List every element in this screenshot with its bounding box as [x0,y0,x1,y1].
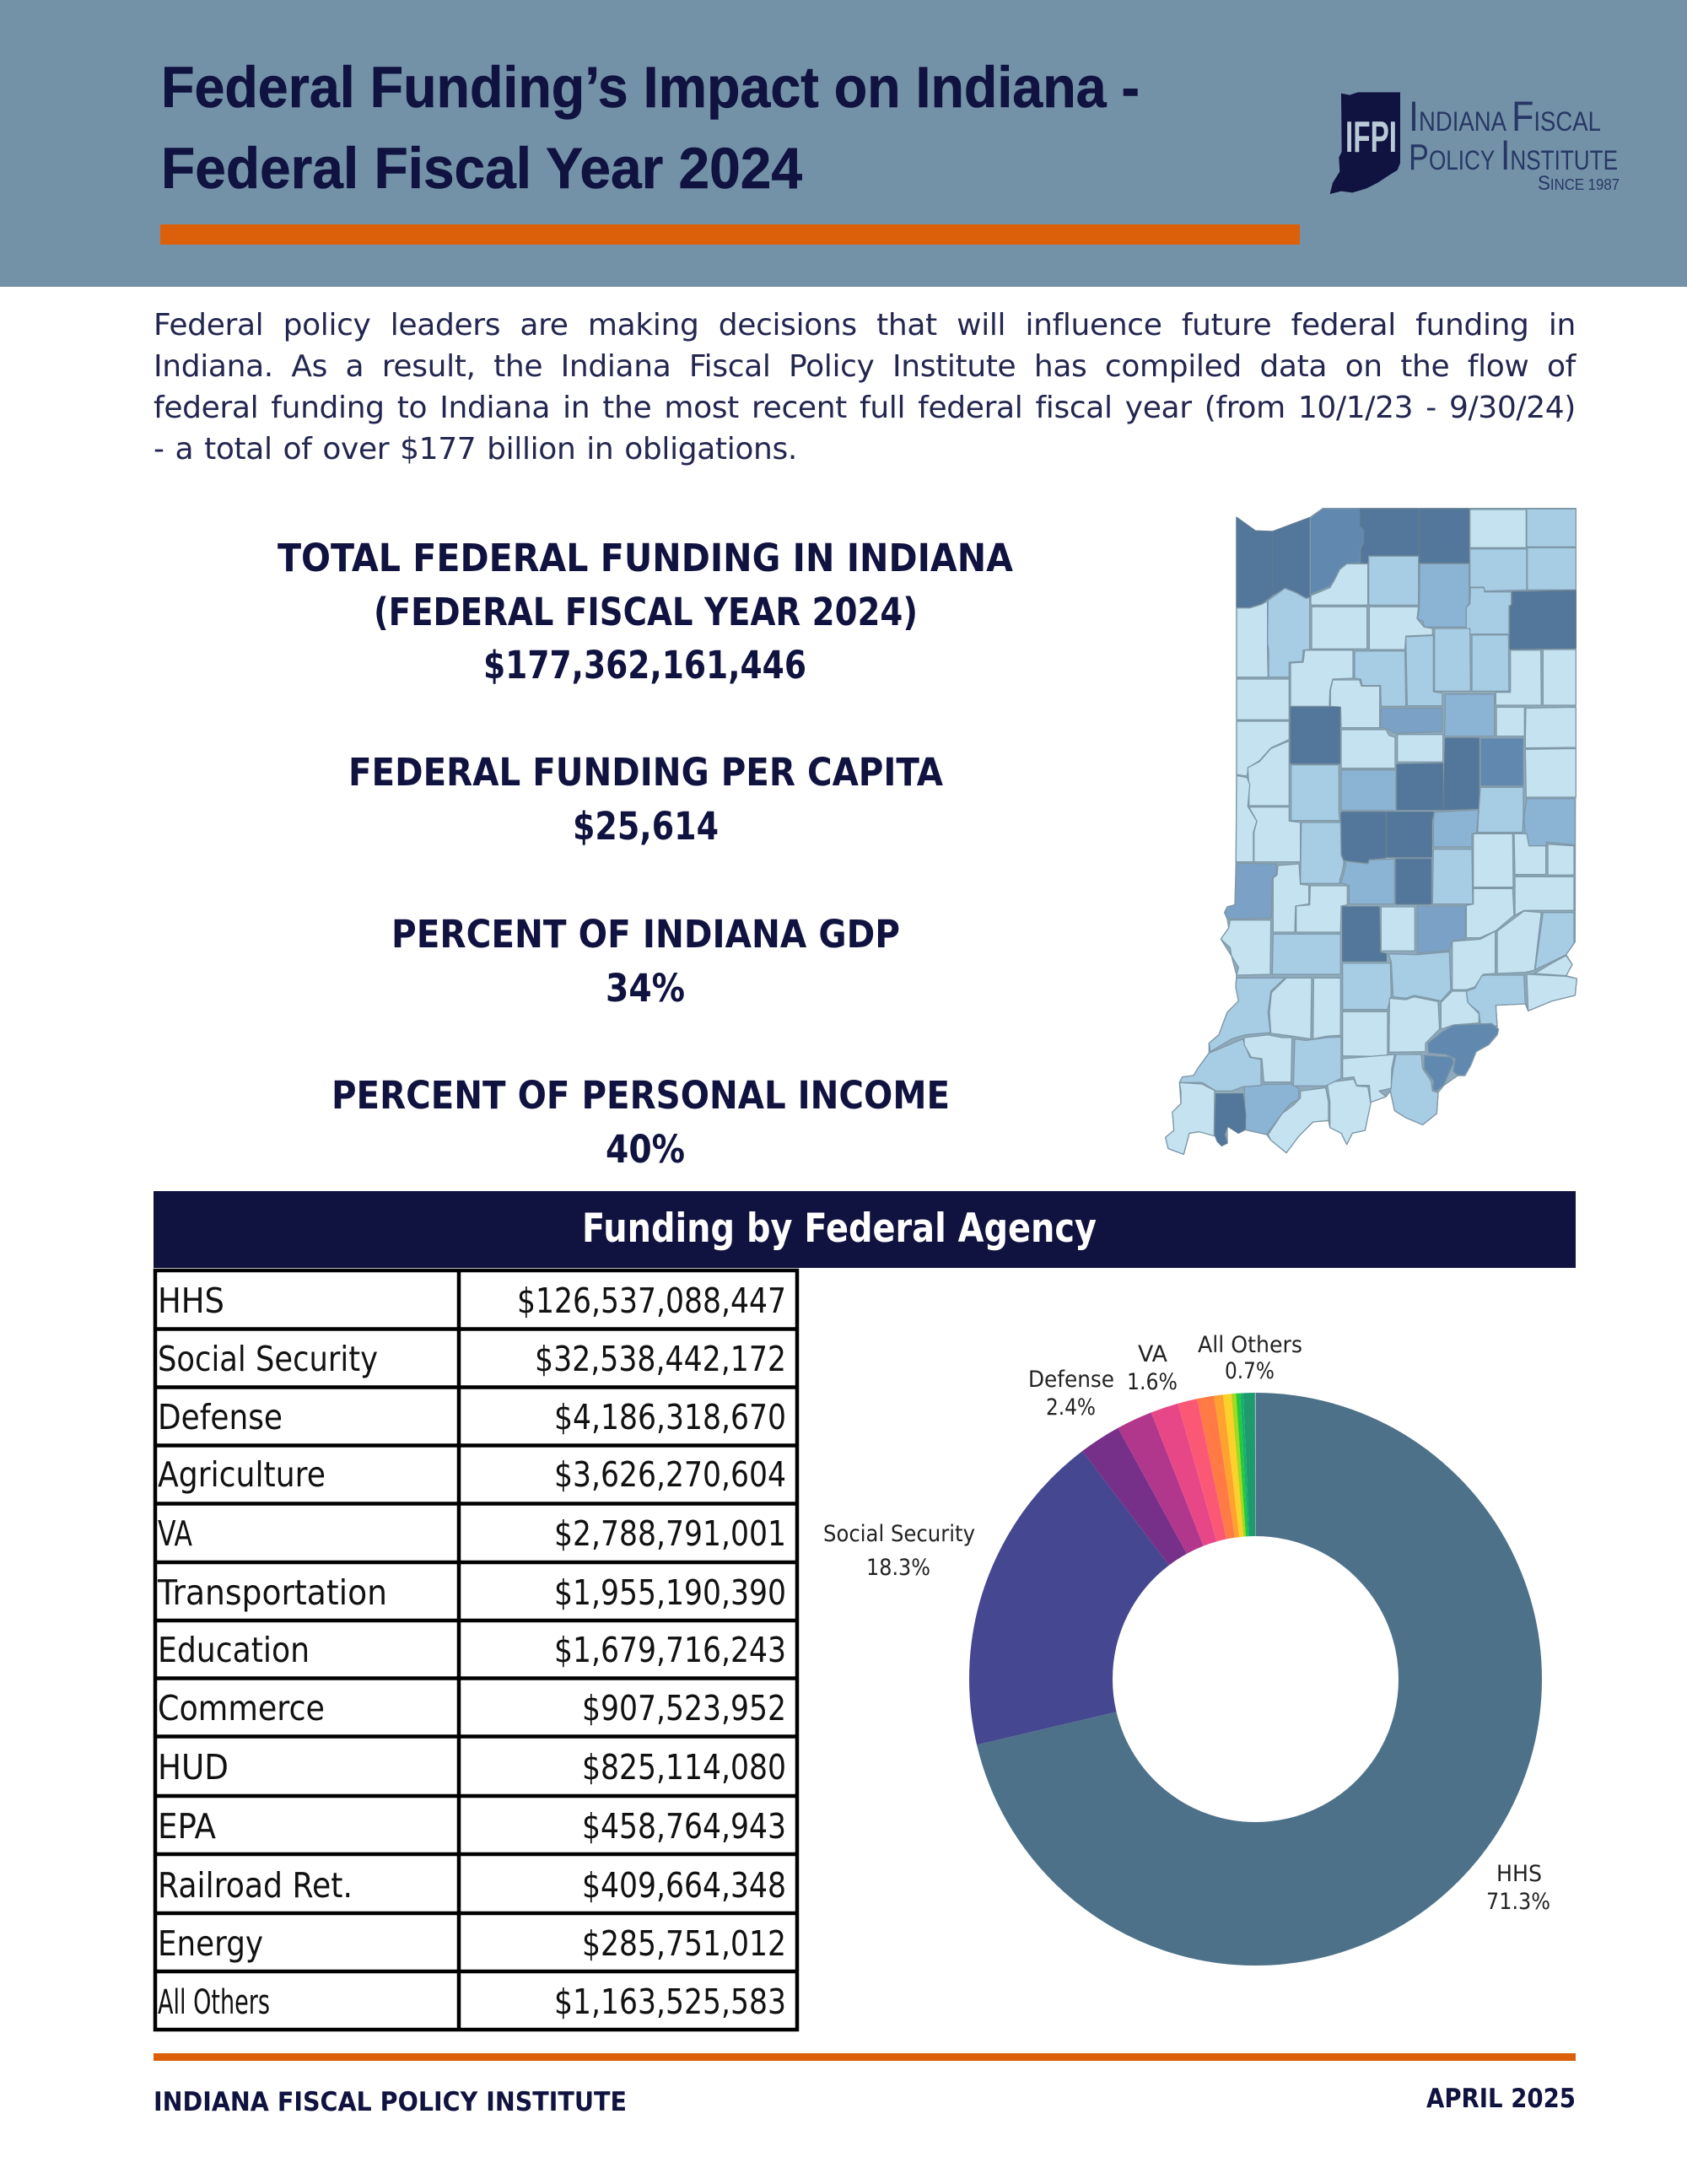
agency funding table [155,1270,797,2030]
table row labels: HHS [158,1281,224,1321]
table row labels: Social Security [158,1339,378,1379]
table amounts: $409,664,348 [582,1865,786,1906]
intro paragraph: federal funding to Indiana in the most recent full federal fiscal year (from 10/1/23 - 9/30/24) [154,391,1576,425]
table amounts: $126,537,088,447 [517,1281,786,1321]
stat: total federal funding [278,536,1013,688]
table row labels: Agriculture [158,1454,326,1495]
stat: total federal funding: TOTAL FEDERAL FUNDING IN INDIANA [278,536,1013,580]
table amounts: $1,163,525,583 [554,1982,786,2022]
label: All Others: 0.7% [1225,1358,1275,1384]
intro paragraph [154,308,1577,466]
table row labels: EPA [158,1806,216,1847]
table row labels: HUD [158,1747,229,1788]
label: Social Security [823,1521,975,1581]
title: Federal Funding’s Impact on Indiana - [161,55,1140,120]
table amounts: $458,764,943 [582,1806,786,1847]
table amounts: $907,523,952 [582,1688,786,1728]
icon: Indiana silhouette with IFPI [1330,92,1400,194]
stat: total federal funding: (FEDERAL FISCAL YEAR 2024) [374,590,918,634]
label: Defense: Defense [1028,1367,1114,1393]
table row labels: Energy [158,1923,263,1964]
table row labels: Commerce [158,1688,325,1728]
label: Defense: 2.4% [1046,1394,1096,1421]
donut chart of funding by agency [1041,1464,1470,1894]
title: Federal Fiscal Year 2024 [161,136,802,201]
table amounts: $32,538,442,172 [535,1339,786,1379]
label: HHS [1486,1861,1550,1915]
header band [0,0,1687,287]
table row labels: Education [158,1630,310,1670]
table amounts: $2,788,791,001 [554,1513,786,1554]
intro paragraph: - a total of over $177 billion in obligations. [154,432,797,466]
label: Defense [1028,1367,1114,1421]
label: All Others: All Others [1198,1332,1302,1358]
stat: total federal funding: $177,362,161,446 [483,643,806,688]
intro paragraph: Indiana. As a result, the Indiana Fiscal Policy Institute has compiled data on the flow of [154,349,1576,384]
label: HHS: HHS [1496,1861,1542,1887]
footer: date: APRIL 2025 [1426,2084,1576,2114]
table amounts: $4,186,318,670 [554,1397,786,1437]
label: VA [1127,1341,1178,1395]
label: Social Security: 18.3% [866,1555,930,1581]
table row labels: All Others [158,1983,270,2022]
table amounts: $3,626,270,604 [554,1454,786,1495]
logo wordmark [1409,93,1620,195]
stat: percent of GDP: 34% [606,966,685,1011]
header orange rule [160,224,1300,245]
table amounts: $285,751,012 [582,1923,786,1964]
label: VA: 1.6% [1127,1369,1178,1395]
table row labels: VA [158,1513,192,1554]
logo wordmark: POLICY INSTITUTE [1409,132,1618,179]
stat: percent of personal income: 40% [606,1127,685,1172]
label: VA: VA [1138,1341,1168,1367]
table row labels [157,1281,387,2022]
title [161,55,1140,201]
logo: Indiana Fiscal Policy Institute [1330,92,1620,195]
stat: percent of personal income: PERCENT OF PERSONAL INCOME [331,1073,950,1118]
panel heading: Funding by Federal Agency [154,1191,1576,1268]
key statistics [278,536,1013,1172]
table amounts: $1,955,190,390 [554,1572,786,1613]
table amounts: $1,679,716,243 [554,1630,786,1670]
table grid [155,1270,797,2030]
table amounts: $825,114,080 [582,1747,786,1788]
intro paragraph: Federal policy leaders are making decisions that will influence future federal funding in [154,308,1576,342]
northern counties [1236,509,1576,904]
panel heading: Funding by Federal Agency: Funding by Federal Agency [582,1205,1097,1252]
stat: percent of personal income [331,1073,950,1172]
footer orange rule [154,2053,1576,2061]
table row labels: Transportation [157,1572,387,1613]
footer: organisation name: INDIANA FISCAL POLICY INSTITUTE [154,2087,627,2117]
choropleth map of Indiana counties [1166,509,1577,1154]
label: HHS: 71.3% [1486,1889,1550,1915]
stat: per capita [348,750,943,849]
label: All Others [1198,1332,1302,1384]
stat: per capita: FEDERAL FUNDING PER CAPITA [348,750,943,795]
table row labels: Railroad Ret. [158,1865,353,1906]
southern counties [1166,859,1577,1154]
stat: percent of GDP [391,912,900,1011]
label: Social Security: Social Security [823,1521,975,1547]
state backing silhouette [1166,509,1577,1154]
stat: per capita: $25,614 [573,804,719,849]
logo wordmark: SINCE 1987 [1538,172,1620,195]
icon: Indiana silhouette with IFPI: IFPI [1345,113,1397,162]
logo wordmark: INDIANA FISCAL [1409,93,1601,140]
table row labels: Defense [158,1397,283,1437]
donut slice labels [823,1332,1550,1915]
table amounts [517,1281,786,2022]
stat: percent of GDP: PERCENT OF INDIANA GDP [391,912,900,957]
